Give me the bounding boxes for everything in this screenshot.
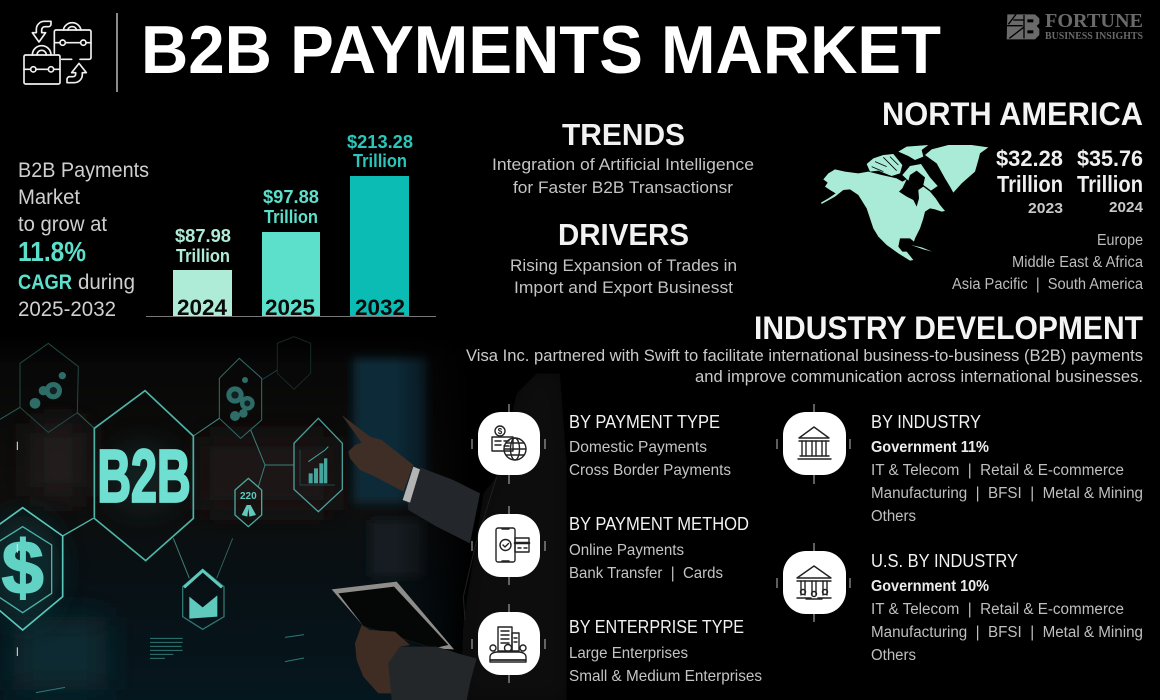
drivers block: DRIVERS <box>558 217 689 252</box>
logo: Fortune Business Insights <box>1007 10 1143 42</box>
holding hand and sleeve <box>355 625 477 700</box>
segment: by payment type: Cross Border Payments <box>569 462 731 479</box>
segment: by enterprise type: BY ENTERPRISE TYPE <box>569 617 744 637</box>
bar chart: market size: $97.88 <box>263 187 319 207</box>
regional values: Trillion <box>997 171 1063 197</box>
other regions list: Europe <box>1097 232 1143 249</box>
header divider <box>116 13 118 92</box>
segment: by payment method: BY PAYMENT METHOD <box>569 514 749 534</box>
segment: by enterprise type: Small & Medium Enterprises <box>569 668 762 685</box>
bar chart: market size <box>146 132 436 320</box>
bar chart: market size: $87.98 <box>175 226 231 246</box>
segment: U.S. by industry <box>871 551 1143 664</box>
icon badge: industry <box>777 404 850 484</box>
bar chart: market size: 2032 <box>355 295 405 320</box>
text: CAGR statement: CAGR <box>18 271 72 294</box>
tablet <box>332 582 454 649</box>
background photo: B2B hologram and businessman: 220 <box>240 491 257 502</box>
icon badge: payment type: $ <box>498 427 503 436</box>
title: B2B PAYMENTS MARKET <box>141 12 941 88</box>
logo: Fortune Business Insights: FORTUNE <box>1045 10 1143 32</box>
heading: Industry Development: INDUSTRY DEVELOPMENT <box>754 310 1143 346</box>
segment: by payment type: BY PAYMENT TYPE <box>569 412 720 432</box>
drivers block: Rising Expansion of Trades in <box>510 256 737 275</box>
text: CAGR statement: during <box>78 271 135 294</box>
segment: by payment method <box>569 514 749 582</box>
segment: by industry <box>871 412 1143 525</box>
segment: by industry: Government 11% <box>871 439 989 456</box>
text: CAGR statement: to grow at <box>18 213 107 236</box>
icon badge: payment type <box>472 404 545 484</box>
segment: by industry: BY INDUSTRY <box>871 412 981 432</box>
trends block: Integration of Artificial Intelligence <box>492 155 754 174</box>
segment: U.S. by industry: U.S. BY INDUSTRY <box>871 551 1018 571</box>
regional values: 2024 <box>1109 199 1144 216</box>
trends block: TRENDS <box>562 117 685 152</box>
segment: by enterprise type: Large Enterprises <box>569 645 688 662</box>
text: industry development description <box>466 347 1143 386</box>
trends block <box>492 117 754 197</box>
segment: by industry: Manufacturing | BFSI | Metal & Mining <box>871 485 1143 502</box>
background photo: B2B hologram and businessman: $ <box>2 525 44 609</box>
text: CAGR statement: 11.8% <box>18 236 86 267</box>
bar chart: market size: 2024 <box>177 295 228 320</box>
drivers block: Import and Export Businesst <box>514 278 733 297</box>
businessman suit body <box>460 373 567 700</box>
icon badge: enterprise type <box>472 604 545 683</box>
segment: by payment method: Bank Transfer | Cards <box>569 565 723 582</box>
segment: by enterprise type <box>569 617 762 685</box>
logo: Fortune Business Insights: BUSINESS INSIGHTS <box>1045 31 1143 42</box>
segment: U.S. by industry: Others <box>871 647 916 664</box>
segment: U.S. by industry: Government 10% <box>871 578 989 595</box>
text: CAGR statement: Market <box>18 186 80 209</box>
text: CAGR statement <box>18 159 149 321</box>
bar chart: market size: 2025 <box>265 295 315 320</box>
other regions list: Middle East & Africa <box>1012 254 1143 271</box>
icon badge: payment method <box>472 506 545 585</box>
segment: by industry: IT & Telecom | Retail & E-commerce <box>871 462 1124 479</box>
pointing hand <box>342 415 480 543</box>
other regions list: Asia Pacific | South America <box>952 276 1143 293</box>
text: industry development description: Visa Inc. partnered with Swift to facilitate international business-to-business (B2B) payments <box>466 347 1143 365</box>
segment: by payment method: Online Payments <box>569 542 684 559</box>
segment: by industry: Others <box>871 508 916 525</box>
text: industry development description: and improve communication across international businesses. <box>695 368 1143 386</box>
text: CAGR statement: B2B Payments <box>18 159 149 182</box>
background photo: B2B hologram and businessman: B2B <box>97 435 191 518</box>
regional values: 2023 <box>1028 200 1063 217</box>
bar chart: market size: Trillion <box>353 151 407 171</box>
bar chart: market size: $213.28 <box>347 132 413 152</box>
segment: by payment type: Domestic Payments <box>569 439 707 456</box>
regional values: Trillion <box>1077 171 1143 197</box>
segment: U.S. by industry: IT & Telecom | Retail & E-commerce <box>871 601 1124 618</box>
icon badge: U.S. by industry <box>777 543 850 622</box>
regional values: $35.76 <box>1077 146 1143 171</box>
segment: U.S. by industry: Manufacturing | BFSI | Metal & Mining <box>871 624 1143 641</box>
trends block: for Faster B2B Transactionsr <box>513 178 733 197</box>
regional values <box>996 146 1144 217</box>
bar chart: market size: Trillion <box>176 246 230 266</box>
map: North America <box>821 145 988 261</box>
bar chart: market size: Trillion <box>264 207 318 227</box>
text: CAGR statement: 2025-2032 <box>18 298 116 321</box>
regional values: $32.28 <box>996 146 1063 171</box>
drivers block <box>510 217 737 297</box>
segment: by payment type <box>569 412 731 479</box>
icon: briefcases exchange <box>24 21 91 84</box>
other regions list <box>952 232 1143 293</box>
heading: North America: NORTH AMERICA <box>882 96 1143 132</box>
background photo: B2B hologram and businessman <box>0 335 570 700</box>
